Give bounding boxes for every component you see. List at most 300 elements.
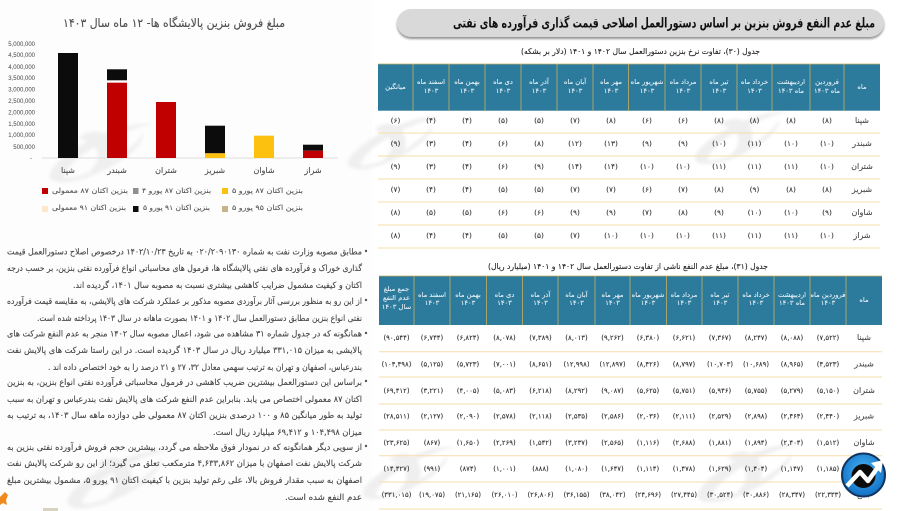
table 31 rows: (۱,۶۲۹) <box>709 465 732 473</box>
table 30 rows: (۷) <box>678 185 688 194</box>
table 30 header: تیر ماه <box>709 78 729 86</box>
table 30 rows: (۴) <box>426 185 436 194</box>
table 30 rows: (۱۱) <box>748 231 761 240</box>
table 31 rows: (۲,۴۴۰) <box>817 412 840 420</box>
table 30 rows: (۵) <box>534 231 544 240</box>
table 31 header: آذر ماه <box>531 290 551 299</box>
bullet points <box>365 250 367 447</box>
table 30 rows: (۹) <box>822 208 832 217</box>
table 30 rows: (۱۲) <box>568 139 582 148</box>
table 30 rows: (۱۱) <box>712 231 726 240</box>
table 31 rows: (۲,۴۰۴) <box>781 439 804 447</box>
icon: orange corner mark <box>0 492 8 505</box>
table 31 rows: (۵,۷۲۳) <box>457 360 480 368</box>
table 31 rows: (۱,۵۱۲) <box>817 439 840 447</box>
table 30 rows: (۹) <box>606 208 616 217</box>
table 30 rows: (۴) <box>462 185 472 194</box>
paragraph 1: مطابق مصوبه وزارت نفت به شماره ۰۲۰/۲۰۹۰۱۳۰ به تاریخ ۱۴۰۲/۱۰/۲۳ درخصوص اصلاح دستورالعمل قیمت <box>7 248 362 258</box>
table 31 rows: (۱۹,۰۷۵) <box>419 491 445 499</box>
y axis labels: 2,000,000 <box>8 110 36 116</box>
table 30 header: ۱۴۰۳ <box>676 87 691 95</box>
table 30 header <box>378 64 880 111</box>
category labels: شتران <box>155 166 177 175</box>
table 31 rows: (۳۰,۸۸۶) <box>743 491 769 499</box>
table 31 header: اسفند ماه <box>418 291 446 299</box>
table 31 rows: (۳۶,۱۵۵) <box>563 491 590 499</box>
table 31 rows: (۲,۱۱۸) <box>529 412 552 420</box>
table 31 rows: (۵,۱۲۵) <box>421 360 444 368</box>
table 31 header: ۱۴۰۳ <box>821 299 836 307</box>
table 31 rows: (۸,۶۵۱) <box>529 360 552 368</box>
table 31 header: تیر ماه <box>710 291 730 299</box>
table 31 rows: (۱,۱۴۷) <box>781 465 804 473</box>
table 30 rows: (۱۰) <box>640 231 654 240</box>
table 31 rows: (۱,۵۴۲) <box>529 439 552 447</box>
table 31 rows: شاوان <box>853 438 875 447</box>
table 30 rows: (۳) <box>426 162 436 171</box>
table 30 rows: (۷) <box>642 208 652 217</box>
table 30 rows: (۹) <box>750 185 759 194</box>
table 31 rows: (۲,۱۱۱) <box>673 412 696 420</box>
text block: analysis bullets <box>7 248 367 503</box>
table 30 rows: (۵) <box>462 208 472 217</box>
table 30 header: ماه <box>857 83 867 91</box>
table 31 rows: (۲۸,۵۱۱) <box>383 412 410 420</box>
table 30 rows: (۴) <box>462 231 472 240</box>
table 31 rows: شبریز <box>853 412 874 420</box>
table 30 rows: (۱۰) <box>820 162 834 171</box>
table 31 rows: (۸,۲۹۲) <box>565 387 588 395</box>
y axis labels: 4,500,000 <box>8 53 36 59</box>
table 31 rows: (۲,۶۸۸) <box>673 439 696 447</box>
table 31 rows: (۲,۱۲۷) <box>421 412 444 420</box>
table 30 rows: (۴) <box>462 116 472 125</box>
y axis labels: 3,000,000 <box>8 88 36 94</box>
table 31 rows: (۶,۸۲۴) <box>457 334 480 342</box>
table 30 rows: شاوان <box>851 208 873 217</box>
panel: bar chart of gasoline sales <box>8 16 338 212</box>
table 31 header: اردیبهشت <box>778 291 806 299</box>
paragraph 1: اکتان و کیفیت مشمول ضرایب کاهشی بیشتری نسبت به مصوبه سال ۱۴۰۱، گردیده اند. <box>73 280 362 291</box>
table 30 rows: (۱۱) <box>712 162 726 171</box>
table 30 rows: (۴) <box>462 139 472 148</box>
table 30 rows: (۷) <box>570 185 580 194</box>
category labels: شپنا <box>61 166 75 175</box>
table 31 rows: (۶,۷۴۴) <box>421 334 444 342</box>
table 31 header: ۱۴۰۳ <box>677 299 692 307</box>
table 30 rows: (۶) <box>534 208 544 217</box>
paragraph 5: عدم النفع شده است. <box>285 493 362 503</box>
table 30 rows: (۸) <box>786 185 796 194</box>
table 31 rows: (۲,۵۷۸) <box>493 412 516 420</box>
paragraph 5: اصفهان به سبب مقدار فروش بالا، علی رغم تولید بنزین با کیفیت اکتان ۹۱ یورو ۵، مشمول بیشترین مبلغ <box>7 476 362 486</box>
title banner <box>397 9 884 37</box>
table 30 rows: (۸) <box>750 116 759 125</box>
table 30 rows: (۵) <box>498 231 508 240</box>
table 31 header: ماه ۱۴۰۳ <box>779 299 805 307</box>
table 30 rows: (۹) <box>534 162 544 171</box>
table 30 header: آبان ماه <box>564 77 587 86</box>
table 31 rows: (۱,۰۸۰) <box>565 465 588 473</box>
table 31 rows: (۸,۲۴۷) <box>745 334 768 342</box>
table 30 header: مهر ماه <box>600 78 622 86</box>
table 30: gasoline rate differences <box>378 64 880 248</box>
table 31 rows: (۴,۵۲۳) <box>817 360 840 368</box>
table 31 rows: (۱,۱۸۵) <box>817 465 840 473</box>
table 31 header: ۱۴۰۳ <box>533 299 548 307</box>
table 31 rows: (۲۸,۳۴۷) <box>779 491 805 499</box>
legend: بنزین اکتان ۹۱ معمولی <box>52 203 126 212</box>
table 30 rows: (۱۰) <box>748 208 761 217</box>
y axis labels: 500,000 <box>13 145 36 151</box>
table 31 rows: (۱۰,۶۸۹) <box>743 360 769 368</box>
y axis labels: - <box>30 156 32 162</box>
table 31 rows: (۱,۸۹۴) <box>745 439 768 447</box>
table 31 header: ۱۴۰۳ <box>749 299 764 307</box>
table 31 rows: (۲۱,۱۶۵) <box>455 491 481 499</box>
table 30 header: ۱۴۰۳ <box>532 87 547 95</box>
table 30 rows: (۶) <box>391 116 400 125</box>
legend: بنزین اکتان ۸۷ معمولی <box>52 186 128 195</box>
table 30 rows: (۹) <box>642 139 652 148</box>
table 31 rows: (۲,۰۳۶) <box>637 412 660 420</box>
table 31 rows: شتران <box>853 386 875 395</box>
table 31 rows: (۳,۲۲۱) <box>421 387 444 395</box>
table 31 rows: (۱,۱۱۶) <box>637 439 660 447</box>
table 30 rows: (۸) <box>714 116 724 125</box>
y axis labels: 4,000,000 <box>8 65 36 71</box>
table 30 rows: (۹) <box>391 139 400 148</box>
table 31 rows: (۶,۳۸۰) <box>637 334 660 342</box>
table 31 rows: (۷,۰۰۱) <box>493 360 516 368</box>
table 30 rows: شپنا <box>855 116 869 125</box>
table 31 header: مرداد ماه <box>671 291 698 299</box>
legend: بنزین اکتان ۹۵ یورو ۵ <box>232 203 303 212</box>
table 30 rows: (۱۴) <box>604 162 618 171</box>
table 30 rows: (۱۰) <box>640 162 654 171</box>
table 30 rows: شبندر <box>851 139 872 148</box>
y axis labels <box>8 42 36 162</box>
table 30 rows: (۱۰) <box>784 208 798 217</box>
table 31 header: ۱۴۰۳ <box>497 299 512 307</box>
table 31 rows: (۹,۲۶۲) <box>601 334 624 342</box>
table 30 rows: (۶) <box>678 116 688 125</box>
paragraph 3 <box>7 328 363 373</box>
table 31 rows: (۱,۸۸۱) <box>709 439 732 447</box>
table 31 header: شهریور ماه <box>632 291 665 299</box>
table 30 rows: (۱۰) <box>784 139 798 148</box>
table 30 rows: (۱۰) <box>676 231 690 240</box>
table 30 header: اردیبهشت <box>777 78 805 86</box>
table 31 rows: (۳,۲۳۷) <box>565 439 588 447</box>
table 31 header: سال ۱۴۰۳ <box>382 303 412 311</box>
table 31 rows: (۲,۸۹۸) <box>745 412 768 420</box>
table 31 rows: (۵,۲۷۹) <box>781 387 804 395</box>
y axis labels: 2,500,000 <box>8 99 36 105</box>
table 30 rows: (۵) <box>498 185 508 194</box>
table 31 rows: (۶,۲۱۸) <box>529 387 552 395</box>
table 30 rows: (۱۰) <box>676 162 690 171</box>
table 31 rows: (۲,۵۳۵) <box>565 412 588 420</box>
table 30 rows: (۹) <box>570 208 580 217</box>
table 31 header: ۱۴۰۳ <box>569 299 584 307</box>
table 31 rows: (۵,۶۲۵) <box>637 387 660 395</box>
y axis labels: 5,000,000 <box>8 42 36 48</box>
table 30 rows: (۵) <box>426 208 436 217</box>
table 31 header: ماه <box>859 296 869 304</box>
table 31 rows: (۹۰,۵۴۴) <box>383 334 410 342</box>
table 30 rows: (۸) <box>822 185 832 194</box>
paragraph 5 <box>7 441 362 503</box>
table 31 header: فروردین ماه <box>810 291 846 299</box>
icon: circular logo with rising arrow <box>842 454 885 496</box>
table 31 header: دی ماه <box>495 291 514 299</box>
table 30 rows: (۱۱) <box>784 162 798 171</box>
table 31 rows: جمع <box>857 490 871 499</box>
table 31 rows: (۳۰,۵۲۴) <box>707 491 733 499</box>
table 31 rows: (۱۴,۴۲۷) <box>383 465 410 473</box>
paragraph 2 <box>7 295 362 324</box>
table 31 rows: (۷,۵۲۲) <box>817 334 840 342</box>
table 30 rows: (۶) <box>498 208 508 217</box>
table 31 rows: (۸۷۴) <box>460 465 477 473</box>
table 30 header: ۱۴۰۳ <box>747 87 762 95</box>
category labels <box>61 166 322 175</box>
table 31 rows: (۳۸,۰۴۲) <box>599 491 626 499</box>
table 31 rows: (۲,۵۲۹) <box>709 412 732 420</box>
table 30 rows: (۷) <box>570 231 580 240</box>
table 30 header: میانگین <box>385 82 406 91</box>
table 30 rows: (۶) <box>642 116 652 125</box>
table 30 rows: (۳) <box>426 139 436 148</box>
table 31 rows: شبندر <box>853 360 874 368</box>
table 31 header: آبان ماه <box>565 290 589 299</box>
table 31 rows: (۸,۰۱۳) <box>565 334 588 342</box>
table 31 rows: (۸,۹۶۵) <box>781 360 804 368</box>
table 31 rows: (۲۶,۸۰۶) <box>527 491 554 499</box>
table 30 header: اسفند ماه <box>417 78 445 86</box>
table 30 rows: (۱۰) <box>712 139 726 148</box>
paragraph 5: از سویی دیگر همانگونه که در نمودار فوق ملاحظه می گردد، بیشترین حجم فروش فرآورده نفتی بنزین به <box>7 441 362 453</box>
table 30 rows: (۸) <box>822 116 832 125</box>
y axis labels: 3,500,000 <box>8 76 36 82</box>
table 30 rows: (۱۰) <box>820 139 834 148</box>
table 31 rows: (۱۰۴,۴۹۸) <box>382 360 412 368</box>
table 30 header: خرداد ماه <box>741 78 768 86</box>
table 30 header: بهمن ماه <box>454 78 480 86</box>
table 31 rows: (۱۲,۸۹۷) <box>599 360 626 368</box>
paragraph 3: همانگونه که در جدول شماره ۳۱ مشاهده می شود، اعمال مصوبه سال ۱۴۰۲ منجر به عدم النفع شرکت های <box>7 328 362 340</box>
table 30 rows: (۱۱) <box>748 162 761 171</box>
table 31 rows: (۷,۳۸۹) <box>529 334 552 342</box>
table 31 header <box>379 276 882 325</box>
paragraph 4: تولید به طور میانگین ۸۵ و ۱۰۰ درصدی بنزین اکتان ۸۷ معمولی طی دوازده ماهه سال ۱۴۰۳، به ترتیب به <box>7 410 363 421</box>
table 31 rows: (۲,۵۸۶) <box>601 412 624 420</box>
table 31 rows: (۲,۲۶۹) <box>493 439 516 447</box>
table 31 header: ۱۴۰۳ <box>641 299 656 307</box>
table 31 header: عدم النفع <box>383 294 410 302</box>
table 31 rows: (۲۶,۰۱۰) <box>491 491 518 499</box>
paragraph 2: از این رو به منظور بررسی آثار برآوردی مصوبه مذکور بر عملکرد شرکت های پالایشی، به مقایسه قیمت فرآورده <box>7 295 362 307</box>
table 31 rows: (۸,۷۹۷) <box>673 360 696 368</box>
table 31 header: ۱۴۰۳ <box>425 299 440 307</box>
category labels: شبندر <box>106 166 127 175</box>
table 31 rows: (۲۳,۶۲۵) <box>383 439 410 447</box>
table 30 rows: (۸) <box>534 139 544 148</box>
table 31 caption: جدول (۳۱)، مبلغ عدم النفع ناشی از تفاوت دستورالعمل سال ۱۴۰۲ و ۱۴۰۱ (میلیارد ریال) <box>488 262 768 271</box>
paragraph 3: پالایشی به میزان ۳۳۱,۰۱۵ میلیارد ریال در سال ۱۴۰۳ گردیده است. در این راستا شرکت های پالایش نفت <box>7 345 363 356</box>
table 30 header: شهریور ماه <box>631 78 664 86</box>
table 31 rows: (۱۰,۷۰۳) <box>707 360 733 368</box>
table 31 rows: (۲۴,۶۹۶) <box>635 491 661 499</box>
table 30 rows: (۱۳) <box>604 139 618 148</box>
table 30 header: فروردین <box>815 78 839 86</box>
table 31 rows: (۹۹۱) <box>424 465 441 473</box>
table 30 header: ۱۴۰۳ <box>424 87 439 95</box>
legend: بنزین اکتان ۹۱ یورو ۵ <box>143 203 210 212</box>
table 30 rows: (۷) <box>606 185 616 194</box>
watermark logos <box>40 101 811 511</box>
table 30 rows: (۷) <box>391 185 400 194</box>
table 31 rows: (۶,۶۲۱) <box>673 334 696 342</box>
table 30 rows: (۱۱) <box>784 231 798 240</box>
y axis labels: 1,500,000 <box>8 122 36 128</box>
table 30 rows: (۸) <box>678 208 688 217</box>
table 31 header: ۱۴۰۳ <box>605 299 620 307</box>
legend: بنزین اکتان ۸۷ یورو ۴ <box>142 186 211 195</box>
table 31 rows: (۵,۷۵۵) <box>745 387 768 395</box>
table 31 rows: (۵,۰۸۳) <box>493 387 516 395</box>
table 31 rows: (۱,۶۴۷) <box>601 465 624 473</box>
table 31 rows: (۱,۰۰۱) <box>493 465 516 473</box>
table 31 rows: (۸,۰۷۸) <box>493 334 516 342</box>
table 30 rows: (۱۱) <box>748 139 761 148</box>
table 31 rows: (۴,۰۰۵) <box>457 387 480 395</box>
table 31 rows: (۱,۶۵۰) <box>457 439 480 447</box>
table 30 rows: (۱۴) <box>568 162 582 171</box>
paragraph 2: نفتی انواع بنزین مطابق دستورالعمل سال ۱۴۰۲ و ۱۴۰۱ بصورت ماهانه در سال ۱۴۰۳ پرداخته شده است. <box>37 314 362 324</box>
table 30 caption: جدول (۳۰)، تفاوت نرخ بنزین دستورالعمل سال ۱۴۰۲ و ۱۴۰۱ (دلار بر بشکه) <box>521 47 760 56</box>
table 31 rows: (۷,۳۶۷) <box>709 334 732 342</box>
paragraph 4: میزان ۱۰۴,۴۹۸ و ۶۹,۴۱۲ میلیارد ریال است. <box>213 428 362 438</box>
legend <box>42 186 303 212</box>
table 30 rows: (۶) <box>642 185 652 194</box>
table 30 rows: (۵) <box>498 116 508 125</box>
legend: بنزین اکتان ۸۷ یورو ۵ <box>232 186 303 195</box>
table 31 rows: (۲۲,۳۳۳) <box>815 491 841 499</box>
table 30 rows: شتران <box>851 162 873 171</box>
category labels: شاوان <box>253 166 275 175</box>
table 31 rows: (۶۹,۴۱۲) <box>383 387 410 395</box>
table 30 rows: (۱۰) <box>604 231 618 240</box>
table 31 rows: (۲,۵۶۵) <box>601 439 624 447</box>
paragraph 4 <box>7 376 363 438</box>
table 31 rows: (۵,۹۴۶) <box>709 387 732 395</box>
category labels: شراز <box>303 166 322 175</box>
table 30 rows: (۸) <box>786 116 796 125</box>
table 31: lost profit amounts <box>379 276 882 509</box>
table 31 rows: (۸۸۸) <box>532 465 549 473</box>
table 30 rows: (۶) <box>498 162 508 171</box>
table 31 rows: (۱,۱۱۴) <box>637 465 660 473</box>
table 31 rows: (۲,۰۹۰) <box>457 412 480 420</box>
table 30 header: ۱۴۰۳ <box>496 87 511 95</box>
paragraph 3: بندرعباس، اصفهان و تهران به ترتیب سهمی معادل ۳۲، ۲۷ و ۲۱ درصد را به خود اختصاص داده اند . <box>48 363 362 373</box>
table 31 rows: (۸,۰۸۸) <box>781 334 804 342</box>
bars <box>58 53 323 158</box>
table 31 header: ۱۴۰۳ <box>713 299 728 307</box>
table 30 header: ۱۴۰۳ <box>604 87 619 95</box>
table 30 rows: (۵) <box>534 116 544 125</box>
table 30 header: ۱۴۰۳ <box>568 87 583 95</box>
table 31 rows: (۹,۰۸۷) <box>601 387 624 395</box>
footer fragment <box>43 508 58 511</box>
table 30 rows: (۱۰) <box>820 231 834 240</box>
table 31 rows: (۳۳۱,۰۱۵) <box>382 491 412 499</box>
table 31 header: ۱۴۰۳ <box>461 299 476 307</box>
y axis labels: 1,000,000 <box>8 133 36 139</box>
table 30 rows: شبریز <box>851 185 872 194</box>
table 30 header: ماه ۱۴۰۳ <box>814 87 840 95</box>
paragraph 1: گذاری خوراک و فرآورده های نفتی پالایشگاه ها، فرمول های محاسباتی انواع فرآورده نفتی بنزین، بر حسب درجه <box>7 262 363 274</box>
table 30 rows: (۴) <box>426 116 436 125</box>
table 30 rows: (۸) <box>391 208 400 217</box>
table 30 header: ماه ۱۴۰۳ <box>778 87 804 95</box>
table 30 rows: (۹) <box>678 139 688 148</box>
table 31 rows: (۲,۴۶۴) <box>781 412 804 420</box>
table 31 header: خرداد ماه <box>742 291 770 299</box>
table 30 rows: (۸) <box>714 185 724 194</box>
table 31 rows: (۸۶۷) <box>424 439 441 447</box>
table 30 header: ۱۴۰۳ <box>460 87 475 95</box>
table 31 rows: (۵,۱۵۰) <box>817 387 840 395</box>
paragraph 5: شرکت پالایش نفت اصفهان با میزان ۴,۶۳۳,۸۶۲ مترمکعب تعلق می گیرد؛ از این رو شرکت پالایش نفت <box>7 458 362 469</box>
table 30 rows: شراز <box>852 231 871 240</box>
chart title: مبلغ فروش بنزین پالایشگاه ها- ۱۲ ماه سال ۱۴۰۳ <box>63 16 285 31</box>
paragraph 4: براساس این دستورالعمل بیشترین ضریب کاهشی در فرمول محاسباتی فرآورده نفتی انواع بنزین، به بنزین <box>7 376 362 388</box>
table 30 rows: (۸) <box>391 231 400 240</box>
table 31 rows: شراز <box>854 464 873 473</box>
table 30 rows: (۹) <box>714 208 724 217</box>
table 31 rows: (۱,۴۰۴) <box>745 465 768 473</box>
table 31 rows: (۱۲,۹۹۸) <box>563 360 590 368</box>
table 31 rows: (۱,۴۷۸) <box>673 465 696 473</box>
table 30 rows: (۹) <box>391 162 400 171</box>
category labels: شبریز <box>204 166 225 175</box>
table 30 header: مرداد ماه <box>670 78 697 86</box>
table 30 rows <box>391 116 873 240</box>
table 31 rows: (۸,۴۲۶) <box>637 360 660 368</box>
table 30 header: ۱۴۰۳ <box>712 87 727 95</box>
table 30 header: آذر ماه <box>529 77 550 86</box>
table 30 rows: (۶) <box>498 139 508 148</box>
paragraph 1 <box>7 248 363 291</box>
table 31 header: مهر ماه <box>602 291 624 299</box>
table 31 rows <box>382 333 875 499</box>
table 31 rows: شپنا <box>857 333 871 342</box>
table 30 rows: (۸) <box>606 116 616 125</box>
paragraph 4: اکتان ۸۷ معمولی اختصاص می یابد. بنابراین عدم النفع شرکت های پالایش نفت بندرعباس و تهران به سبب <box>7 395 362 405</box>
table 31 header: بهمن ماه <box>455 291 481 299</box>
table 30 header: ۱۴۰۳ <box>640 87 655 95</box>
table 30 rows: (۴) <box>462 162 472 171</box>
table 30 rows: (۴) <box>426 231 436 240</box>
table 30 rows: (۷) <box>570 116 580 125</box>
table 31 header: جمع مبلغ <box>384 285 409 293</box>
table 31 rows: (۵,۷۵۱) <box>673 387 696 395</box>
table 30 header: دی ماه <box>493 78 513 86</box>
table 30 rows: (۵) <box>534 185 544 194</box>
